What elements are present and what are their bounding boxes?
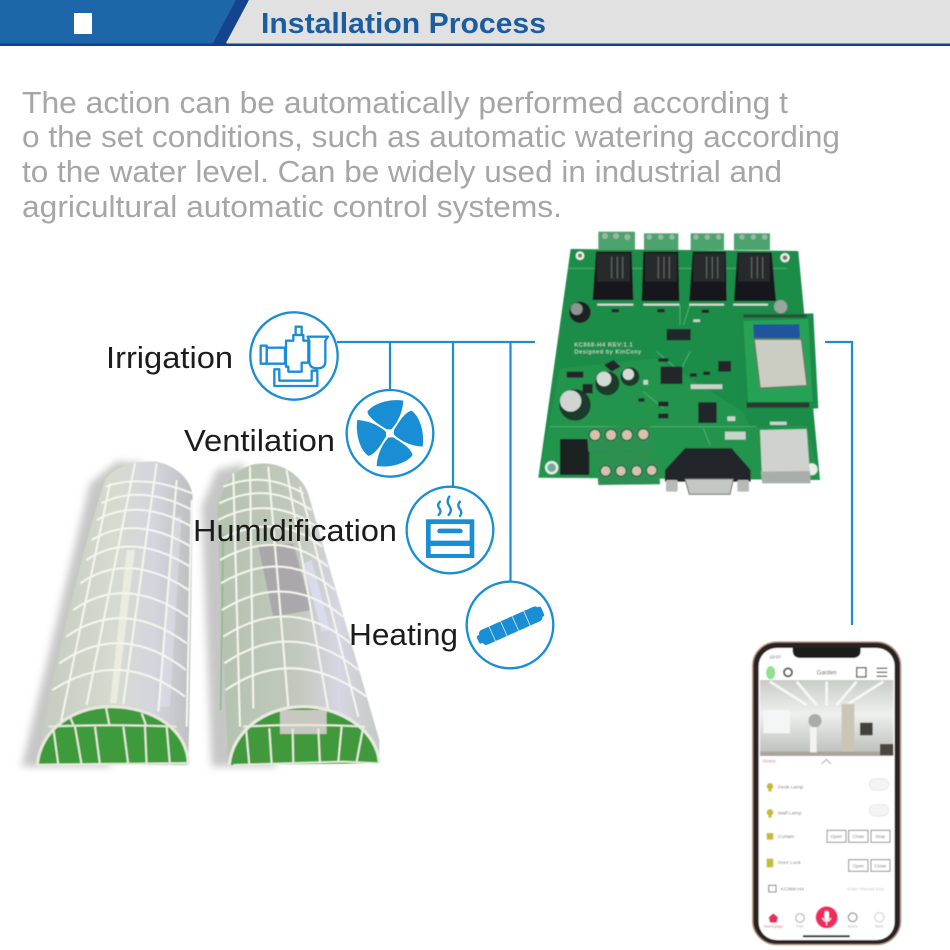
- connector lines: [337, 342, 852, 625]
- power jack: [560, 439, 589, 475]
- silkscreen text: KC868-H4 REV:1.1: [574, 343, 633, 349]
- smartphone app: KC868-H4: [781, 886, 804, 892]
- description text: agricultural automatic control systems.: [22, 189, 562, 224]
- smartphone app: 10:07: [769, 655, 781, 660]
- PCB controller board: Designed by KinCony: [574, 349, 641, 355]
- smartphone app: Wall Lamp: [778, 810, 802, 816]
- smartphone app: [753, 642, 901, 945]
- icon: irrigation pump: [250, 312, 338, 400]
- smartphone app: Scene: [847, 924, 858, 928]
- smartphone app: Door Lock: [778, 860, 801, 866]
- description text: o the set conditions, such as automatic watering according: [22, 119, 840, 154]
- header banner: [0, 0, 950, 46]
- device list: Device: [763, 759, 776, 764]
- chips: [567, 309, 731, 423]
- greenhouse left: [37, 461, 193, 765]
- ethernet port: [760, 429, 811, 483]
- smartphone app: Open: [853, 863, 864, 868]
- screw terminals top: [598, 232, 770, 250]
- smartphone app: Garden: [817, 670, 837, 676]
- smartphone app: Close: [852, 834, 865, 839]
- description text: to the water level. Can be widely used in industrial and: [22, 154, 782, 189]
- capacitors: [559, 300, 787, 421]
- smartphone app: More: [875, 924, 883, 928]
- label: Heating: Heating: [349, 617, 458, 652]
- DB9 serial connector: [665, 448, 751, 482]
- notch: [793, 648, 861, 658]
- phone body: [753, 642, 901, 945]
- icon: humidifier: [407, 487, 493, 573]
- room photo: [760, 680, 893, 756]
- label: Ventilation: Ventilation: [184, 423, 335, 458]
- smartphone app: Plan: [796, 924, 804, 928]
- wifi module: [739, 313, 818, 410]
- description text: The action can be automatically performed according t: [22, 85, 788, 120]
- description text: [22, 85, 840, 224]
- smartphone app: Home page: [764, 924, 783, 928]
- smartphone app: Curtain: [778, 834, 794, 840]
- board base: [538, 249, 820, 480]
- smartphone app: Stop: [876, 834, 886, 839]
- smartphone app: Enter Record Key: [847, 887, 885, 892]
- greenhouse photo: [22, 461, 379, 767]
- label: Irrigation: Irrigation: [106, 340, 233, 375]
- status and title row: [766, 666, 775, 679]
- greenhouse right: [217, 463, 379, 765]
- icon: ventilation fan: [347, 390, 433, 477]
- heading: Installation Process: [261, 8, 546, 40]
- screw terminals bottom: [587, 425, 653, 452]
- smartphone app: Close: [874, 863, 887, 868]
- smartphone app: Desk Lamp: [778, 784, 803, 790]
- PCB controller board: [538, 232, 820, 494]
- icon: heating tube: [467, 582, 553, 668]
- bottom navigation: [769, 913, 778, 923]
- label: Humidification: Humidification: [193, 513, 397, 548]
- smartphone app: Open: [831, 834, 842, 839]
- relays: [593, 252, 776, 301]
- greenhouse shadows: [22, 462, 277, 767]
